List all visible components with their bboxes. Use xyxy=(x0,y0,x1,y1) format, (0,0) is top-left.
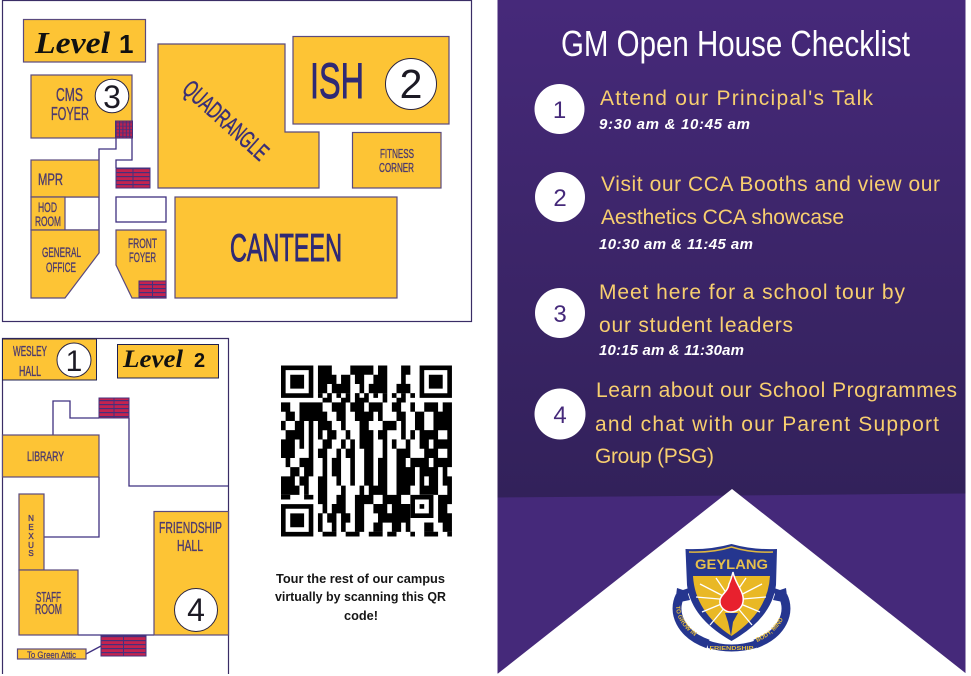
item 2: 10:30 am & 11:45 am xyxy=(599,236,753,253)
torch flame xyxy=(720,572,743,612)
ribbon: TO GROW IN xyxy=(676,606,697,636)
room: fitness corner: CORNER xyxy=(379,160,414,175)
item 4: Group (PSG) xyxy=(595,445,714,468)
stairs: front foyer xyxy=(139,281,166,298)
stairs: centre xyxy=(116,168,150,188)
torch handle xyxy=(725,613,738,636)
room: MPR: MPR xyxy=(38,171,63,189)
room: HOD room: HOD xyxy=(38,199,57,215)
room: Friendship Hall: FRIENDSHIP xyxy=(159,520,222,537)
room: CMS foyer: FOYER xyxy=(51,104,89,124)
room: canteen xyxy=(175,197,397,298)
school crest xyxy=(672,544,790,652)
room: front foyer: FOYER xyxy=(129,249,156,265)
item 1: Attend our Principal's Talk xyxy=(600,87,874,110)
shield xyxy=(686,544,777,641)
panel: checklist xyxy=(498,0,966,674)
item 2: Visit our CCA Booths and view our xyxy=(601,173,940,196)
room: general office: OFFICE xyxy=(46,259,76,275)
item 3: our student leaders xyxy=(599,314,793,337)
marker 3: 3 xyxy=(103,79,121,115)
ribbon: FRIENDSHIP xyxy=(710,646,754,652)
room: quadrangle xyxy=(158,44,319,188)
panel: level 1 map xyxy=(2,0,472,322)
level 2 heading: Level xyxy=(122,346,183,373)
ribbon xyxy=(672,588,790,652)
stairs: top xyxy=(99,398,129,418)
item 3: 3 xyxy=(553,301,567,328)
item 1 xyxy=(534,84,874,134)
room: fitness corner: FITNESS xyxy=(380,146,414,161)
marker 4 xyxy=(174,588,218,632)
room: library: LIBRARY xyxy=(27,449,64,464)
item 4 xyxy=(534,379,957,468)
room: CMS foyer: CMS xyxy=(56,85,83,105)
item 1: 1 xyxy=(553,97,566,124)
room: quadrangle: QUADRANGLE xyxy=(177,75,274,166)
room: staff room xyxy=(19,570,78,635)
marker 2: 2 xyxy=(400,61,422,107)
item 2 xyxy=(535,172,940,253)
marker 4: 4 xyxy=(187,592,205,628)
room: Wesley Hall: WESLEY xyxy=(13,344,47,360)
item 4: 4 xyxy=(553,402,567,429)
marker 2 xyxy=(386,58,436,110)
level 1 heading: Level xyxy=(34,25,110,60)
item 1: 9:30 am & 10:45 am xyxy=(599,116,750,133)
room: ISH: ISH xyxy=(310,53,364,109)
room: staff room: STAFF xyxy=(36,590,61,606)
QR caption: code! xyxy=(344,609,378,623)
lower purple band xyxy=(498,494,966,674)
QR caption xyxy=(275,572,446,623)
room: Friendship Hall: HALL xyxy=(177,538,203,555)
room: MPR xyxy=(31,160,99,197)
room: fitness corner xyxy=(352,132,441,188)
corridor outlines xyxy=(65,138,132,253)
item 3: Meet here for a school tour by xyxy=(599,281,906,304)
room: HOD room: ROOM xyxy=(35,213,61,229)
level 1 heading xyxy=(24,20,146,62)
room: general office: GENERAL xyxy=(42,244,81,260)
marker 3 xyxy=(95,79,129,115)
room: nexus: X xyxy=(28,532,34,541)
marker 1 xyxy=(57,343,91,378)
level 1 heading: 1 xyxy=(119,29,133,59)
ribbon: BODY, MIND xyxy=(756,618,782,642)
room: Friendship Hall xyxy=(154,512,228,635)
item 3: 10:15 am & 11:30am xyxy=(599,342,744,359)
room: nexus: E xyxy=(28,523,34,532)
room: Wesley Hall: HALL xyxy=(19,364,41,380)
level 2 heading: 2 xyxy=(194,350,205,372)
room: staff room: ROOM xyxy=(35,602,62,618)
room: HOD room xyxy=(31,197,65,230)
item 4: and chat with our Parent Support xyxy=(595,413,939,436)
crest name: GEYLANG xyxy=(695,556,768,572)
room: ISH xyxy=(293,36,449,124)
room: front foyer: FRONT xyxy=(128,235,157,251)
room: Wesley Hall xyxy=(2,339,96,380)
QR caption: virtually by scanning this QR xyxy=(275,590,446,604)
room: general office xyxy=(31,230,99,298)
corridor outlines xyxy=(44,401,228,654)
room: library xyxy=(2,435,99,477)
room: nexus xyxy=(19,494,44,570)
sun rays xyxy=(696,578,766,625)
QR code xyxy=(281,366,452,536)
room: CMS foyer xyxy=(31,75,132,138)
label: to green attic: To Green Attic xyxy=(27,650,76,661)
level 2 heading xyxy=(118,344,218,378)
marker 1: 1 xyxy=(66,345,82,378)
room: nexus: N xyxy=(28,514,34,523)
item 2: Aesthetics CCA showcase xyxy=(601,206,844,229)
room: nexus: U xyxy=(28,541,34,550)
QR caption: Tour the rest of our campus xyxy=(276,572,445,586)
item 2: 2 xyxy=(553,185,567,212)
panel: level 2 map xyxy=(2,338,228,674)
room: front foyer xyxy=(116,230,166,298)
room: canteen: CANTEEN xyxy=(230,227,342,270)
room: nexus: S xyxy=(28,549,34,558)
white triangle xyxy=(498,489,966,676)
stairs: bottom xyxy=(101,636,146,656)
item 3 xyxy=(535,281,906,359)
item 4: Learn about our School Programmes xyxy=(596,379,957,402)
room: empty box xyxy=(116,197,166,222)
stairs: CMS foyer xyxy=(116,121,132,138)
